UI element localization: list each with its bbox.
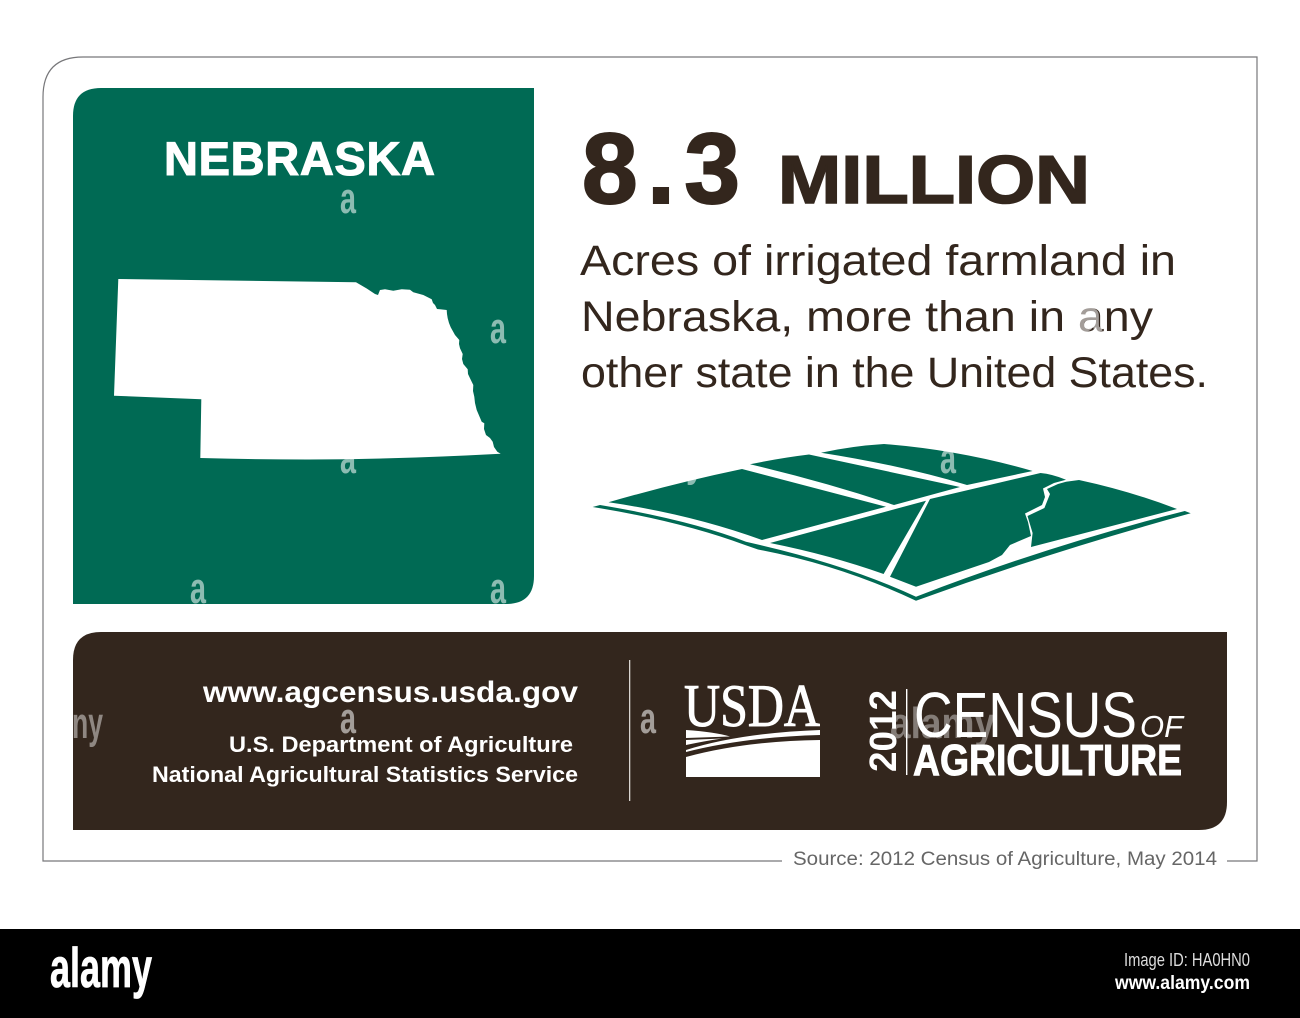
description text xyxy=(580,237,1208,397)
website: www.agcensus.usda.gov xyxy=(202,676,578,709)
agency names xyxy=(152,732,578,787)
agency names: National Agricultural Statistics Service xyxy=(152,762,578,787)
logo: Census of Agriculture: OF xyxy=(1140,709,1185,744)
big number: 8.3 MILLION: MILLION xyxy=(778,142,1090,218)
watermark glyphs: a xyxy=(940,434,956,483)
panel: agency footer xyxy=(72,632,1227,830)
watermark glyphs xyxy=(190,174,506,613)
logo: USDA xyxy=(684,673,820,777)
watermark glyphs xyxy=(72,694,995,748)
logo: Census of Agriculture: AGRICULTURE xyxy=(913,736,1182,785)
watermark glyphs: a xyxy=(340,434,356,483)
watermark glyphs: a xyxy=(490,564,506,613)
watermark glyphs: a xyxy=(190,564,206,613)
heading: NEBRASKA: NEBRASKA xyxy=(164,132,435,185)
watermark glyph over text: a xyxy=(1076,292,1103,341)
description text: Nebraska, more than in any xyxy=(581,293,1154,341)
icon: farm fields xyxy=(593,434,1191,601)
image id: Image ID: HA0HN0 xyxy=(1124,950,1250,970)
watermark glyphs: a xyxy=(340,174,356,223)
logo: USDA: USDA xyxy=(684,673,820,739)
panel: Nebraska state xyxy=(73,88,534,613)
watermark glyphs: a xyxy=(490,304,506,353)
stock logo: alamy xyxy=(50,936,152,999)
watermark glyphs: ny xyxy=(72,699,103,748)
watermark glyphs: alamy xyxy=(890,699,995,748)
stock url: www.alamy.com xyxy=(1114,973,1250,994)
big number: 8.3 MILLION: 8.3 xyxy=(582,113,740,225)
outer rounded frame xyxy=(43,57,1257,861)
description text: other state in the United States. xyxy=(581,349,1208,397)
source note: Source: 2012 Census of Agriculture, May 2014 xyxy=(793,849,1217,870)
watermark glyphs: a xyxy=(640,694,656,743)
logo: Census of Agriculture: CENSUS xyxy=(914,679,1137,751)
description text: Acres of irrigated farmland in xyxy=(580,237,1176,285)
icon: farm fields: y xyxy=(686,437,704,486)
stock photo bar xyxy=(0,929,1300,1018)
big number: 8.3 MILLION xyxy=(582,113,1090,225)
logo: Census of Agriculture xyxy=(863,679,1185,785)
map: Nebraska outline xyxy=(114,279,501,459)
logo: Census of Agriculture: 2012 xyxy=(863,690,905,772)
watermark glyphs: a xyxy=(340,694,356,743)
agency names: U.S. Department of Agriculture xyxy=(229,732,573,757)
